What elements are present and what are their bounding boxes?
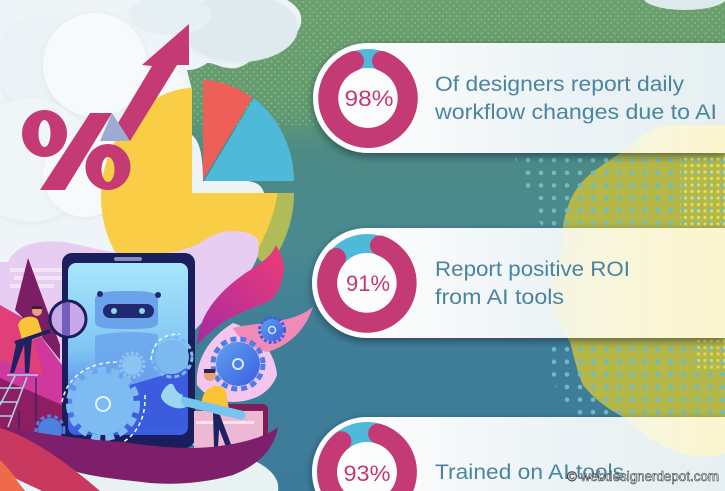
phone body	[62, 253, 195, 448]
yellow blob	[550, 125, 725, 457]
percentage label: 98%	[344, 86, 394, 111]
percentage label: 93%	[344, 461, 390, 486]
magnifier	[50, 301, 86, 337]
card text: workflow changes due to AI	[434, 101, 717, 124]
cloud behind pie notch	[192, 135, 264, 193]
small blue gear	[260, 318, 284, 342]
growth arrow	[118, 24, 189, 141]
donut chart 98%	[328, 58, 408, 138]
watermark: © webdesignerdepot.com	[567, 469, 719, 484]
salmon leaf	[233, 307, 313, 352]
red pie slice	[203, 80, 252, 180]
right pale leaf	[197, 323, 277, 402]
small screen gear	[120, 353, 144, 377]
scaffold lines	[19, 378, 36, 432]
card text: Of designers report daily	[435, 73, 685, 96]
laptop	[194, 404, 268, 449]
stat card 91%	[312, 228, 725, 338]
red sweep	[0, 428, 100, 491]
phone screen	[68, 263, 188, 435]
stat card 98%	[313, 43, 725, 153]
card background	[312, 417, 725, 491]
blob tint	[623, 417, 725, 457]
boat shape	[0, 427, 278, 484]
right pink leaf	[197, 245, 284, 345]
blob tint	[620, 125, 725, 153]
dark red base	[0, 378, 62, 445]
card background	[312, 228, 725, 338]
card text: from AI tools	[435, 286, 564, 309]
card text: Trained on AI tools	[435, 461, 624, 484]
mechanic with wrench	[161, 369, 241, 447]
corner gear	[36, 416, 64, 444]
dot field	[514, 155, 725, 417]
large blue gear	[213, 339, 263, 389]
percent sign	[22, 110, 131, 190]
crimson hill	[0, 305, 42, 375]
large screen gear	[62, 362, 145, 442]
cloud mass	[0, 0, 301, 262]
upper screen gear	[151, 334, 192, 377]
lilac backdrop	[0, 231, 259, 445]
yellow pie slice	[101, 88, 278, 285]
illustration: robot in phone	[0, 231, 313, 491]
worker with magnifier	[10, 306, 50, 373]
blue pie slice	[204, 98, 294, 181]
percentage label: 91%	[346, 271, 390, 296]
donut chart 93%	[317, 422, 417, 491]
white strip	[15, 478, 42, 491]
card background	[313, 43, 725, 153]
ladder	[0, 375, 38, 427]
donut chart 91%	[327, 244, 407, 323]
halftone texture	[180, 0, 725, 125]
small cloud top right	[643, 0, 725, 10]
olive pie slice	[255, 193, 294, 268]
card text: Report positive ROI	[435, 258, 630, 281]
orange corner	[0, 460, 24, 491]
pink left hill	[0, 305, 62, 445]
cloud below boat	[60, 462, 278, 491]
phone speaker	[114, 257, 142, 261]
maroon triangle tree	[15, 258, 60, 360]
pale stripes	[10, 268, 72, 288]
robot	[95, 291, 188, 430]
pie chart	[101, 80, 294, 285]
blob tint	[550, 228, 725, 338]
stat card 93%	[312, 417, 725, 491]
